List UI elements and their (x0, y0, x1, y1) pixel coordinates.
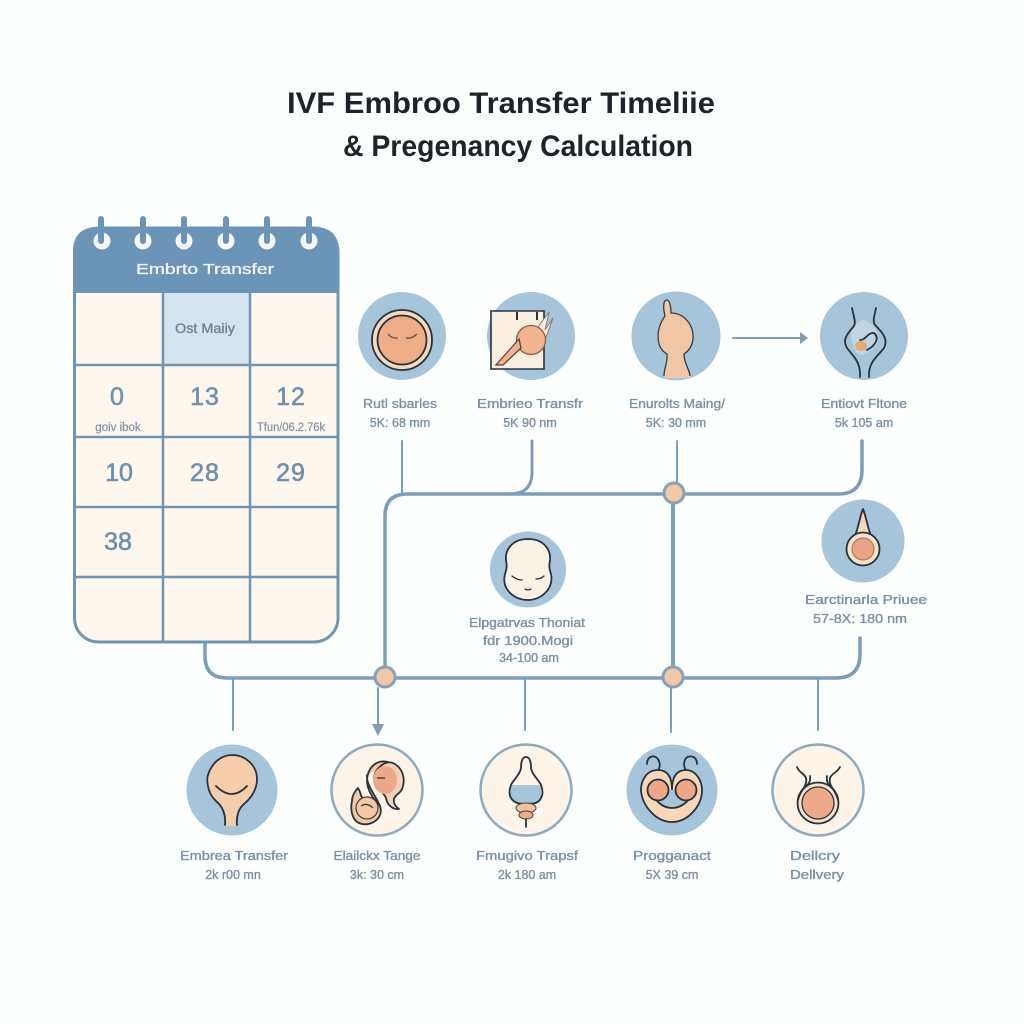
label: progganact (633, 849, 712, 882)
label: enurolts maing: Enurolts Maing/ (629, 397, 726, 411)
label: rutl sbarles: 5K: 68 mm (370, 416, 430, 430)
calendar dates: 0 (110, 383, 124, 411)
label: rutl sbarles: Rutl sbarles (363, 397, 437, 411)
label: delivery: Dellcry (790, 849, 841, 863)
icon: bottle (480, 744, 572, 836)
calendar small notes: goiv ibok (95, 422, 141, 434)
calendar dates: 28 (190, 459, 220, 487)
label: earctinarla priuee: Earctinarla Priuee (805, 593, 927, 607)
title: IVF Embroo Transfer Timeliie (287, 87, 715, 120)
calendar body (74, 228, 338, 642)
label: delivery (790, 849, 845, 882)
calendar small notes: Tfun/06.2.76k (257, 422, 325, 434)
label: center milestone: Elpgatrvas Thoniat (469, 616, 586, 630)
icon: silhouette (632, 292, 720, 380)
icon: embryo transfer balloon (186, 744, 278, 836)
icon: baby face (490, 532, 566, 608)
calendar dates (104, 383, 306, 556)
label: entiovt flione: 5k 105 am (835, 416, 893, 430)
calendar small notes (95, 422, 325, 434)
label: enurolts maing: 5K: 30 mm (646, 416, 706, 430)
label: rutl sbarles (363, 397, 437, 430)
label: enurolts maing (629, 397, 726, 430)
panel: calendar (73, 219, 339, 642)
label: embrieo transfr: 5K 90 nm (503, 416, 557, 430)
icon: rutl sbarles (358, 292, 446, 380)
label: entiovt flione: Entiovt Fltone (821, 397, 907, 411)
node: bottom left junction (375, 667, 395, 687)
label: earctinarla priuee (805, 593, 927, 626)
calendar title: Embrto Transfer (136, 261, 274, 278)
label: earctinarla priuee: 57-8X: 180 nm (813, 612, 907, 626)
icon: embryo transfer notepad (487, 292, 575, 380)
calendar header (73, 227, 339, 293)
label: center milestone (469, 616, 586, 665)
label: embrieo transfr (477, 397, 583, 430)
label: fmugivo trapsf: Fmugivo Trapsf (476, 849, 579, 863)
calendar dates: 13 (190, 383, 220, 411)
label: entiovt flione (821, 397, 907, 430)
icon: twin swirl (626, 744, 718, 836)
calendar dates: 38 (104, 528, 132, 556)
title (287, 87, 715, 163)
label: elailckx tange: Elailckx Tange (334, 849, 421, 863)
label: embrea transfer: Embrea Transfer (180, 849, 288, 863)
connector lines (205, 338, 862, 732)
calendar dates: 10 (105, 459, 133, 487)
label: fmugivo trapsf (476, 849, 579, 882)
label: embrea transfer: 2k r00 mn (205, 868, 261, 882)
icon: delivery (772, 744, 864, 836)
highlighted cell (163, 293, 250, 365)
title: & Pregenancy Calculation (343, 130, 693, 163)
label: progganact: Progganact (633, 849, 712, 863)
arrow: right (800, 332, 808, 344)
label: elailckx tange: 3k: 30 cm (350, 868, 404, 882)
highlighted cell text: Ost Maiiy (175, 320, 235, 336)
icon: swirl (332, 744, 422, 836)
label: center milestone: fdr 1900.Mogi (483, 634, 573, 648)
calendar dates: 29 (276, 459, 306, 487)
label: embrea transfer (180, 849, 288, 882)
label: embrieo transfr: Embrieo Transfr (477, 397, 583, 411)
label: progganact: 5X 39 cm (646, 868, 698, 882)
label: center milestone: 34-100 am (499, 651, 559, 665)
label: fmugivo trapsf: 2k 180 am (498, 868, 556, 882)
label: delivery: Dellvery (790, 868, 845, 882)
calendar rings (94, 219, 318, 250)
icon: uterus (820, 292, 908, 380)
label: elailckx tange (334, 849, 421, 882)
calendar dates: 12 (276, 383, 306, 411)
icon: cone and circle (822, 500, 904, 582)
calendar grid (75, 293, 338, 641)
arrow: down (372, 724, 384, 736)
node: top junction (664, 483, 684, 503)
node: bottom right junction (663, 667, 683, 687)
